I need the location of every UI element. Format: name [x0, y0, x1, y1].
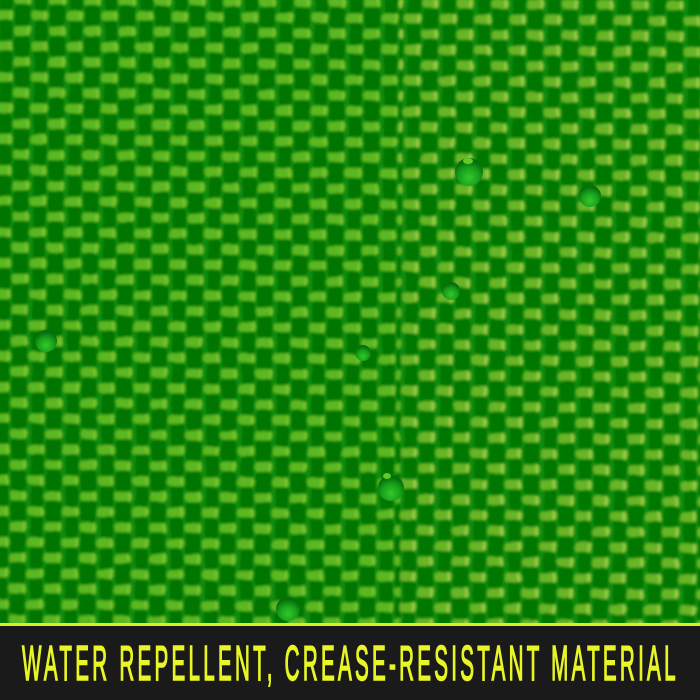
droplet 5	[35, 330, 57, 352]
caption text: WATER REPELLENT, CREASE-RESISTANT MATERIAL	[22, 636, 676, 690]
droplet 4	[355, 345, 371, 361]
droplet 6	[378, 473, 404, 501]
caption band	[0, 623, 700, 700]
droplet 1	[455, 158, 483, 186]
water droplets	[35, 158, 601, 621]
droplet 7	[276, 597, 300, 621]
droplet 3	[442, 282, 460, 300]
droplet 2	[579, 185, 601, 207]
